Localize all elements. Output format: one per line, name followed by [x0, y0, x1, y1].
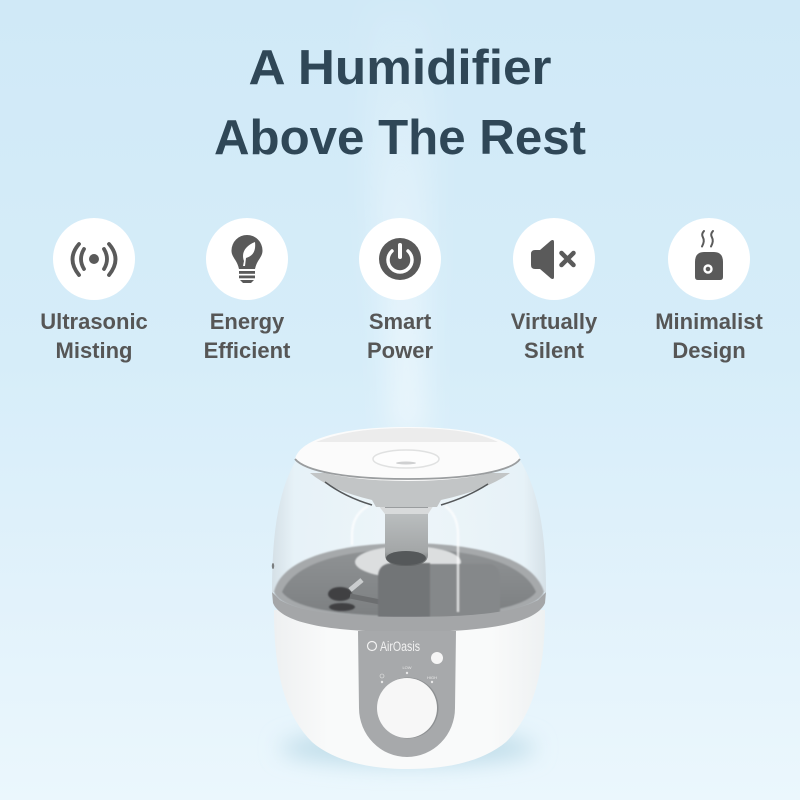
label: energy efficient: Energy	[210, 309, 285, 334]
transparent water tank dome	[272, 460, 546, 592]
humidifier product	[272, 427, 546, 769]
label: minimalist design: Minimalist	[655, 309, 763, 334]
mist stem	[372, 484, 441, 566]
icon: power button	[359, 218, 441, 300]
float and cord	[328, 587, 355, 611]
label: ultrasonic misting: Misting	[56, 338, 132, 363]
label: virtually silent: Virtually	[511, 309, 598, 334]
label: energy efficient	[204, 309, 291, 363]
feature: energy efficient	[204, 218, 291, 363]
tank inner dark tray	[274, 543, 544, 620]
speed labels	[402, 665, 437, 680]
feature: virtually silent	[511, 218, 598, 363]
white base body	[274, 610, 545, 769]
power button	[431, 652, 443, 664]
speed labels: LOW	[402, 665, 412, 670]
white lid	[295, 427, 520, 481]
icon: light bulb with leaf	[206, 218, 288, 300]
icon: humidifier with steam	[668, 218, 750, 300]
control panel	[358, 631, 456, 757]
label: smart power: Power	[367, 338, 433, 363]
icon: ultrasonic waves	[53, 218, 135, 300]
label: ultrasonic misting: Ultrasonic	[40, 309, 148, 334]
label: energy efficient: Efficient	[204, 338, 291, 363]
brand logo: AirOasis	[380, 639, 420, 654]
title	[214, 41, 586, 165]
grey collar band	[272, 592, 546, 632]
pump block	[378, 563, 500, 617]
atomizer disc	[355, 546, 461, 578]
speed indicator dots	[380, 672, 433, 683]
label: virtually silent	[511, 309, 598, 363]
label: smart power	[367, 309, 433, 363]
speed labels: HIGH	[427, 675, 437, 680]
feature: ultrasonic misting	[40, 218, 148, 363]
floor shadow	[280, 731, 536, 765]
label: virtually silent: Silent	[524, 338, 585, 363]
icon: muted speaker	[513, 218, 595, 300]
label: smart power: Smart	[369, 309, 432, 334]
feature: minimalist design	[655, 218, 763, 363]
mist plume	[365, 0, 435, 435]
control knob	[378, 678, 438, 738]
label: minimalist design: Design	[672, 338, 746, 363]
title: A Humidifier	[248, 41, 552, 95]
label: minimalist design	[655, 309, 763, 363]
title: Above The Rest	[214, 111, 586, 165]
tank edge marker	[272, 563, 274, 569]
lid underside bowl	[310, 473, 510, 507]
label: ultrasonic misting	[40, 309, 148, 363]
tank reflection lines	[352, 506, 458, 612]
feature: smart power	[359, 218, 441, 363]
